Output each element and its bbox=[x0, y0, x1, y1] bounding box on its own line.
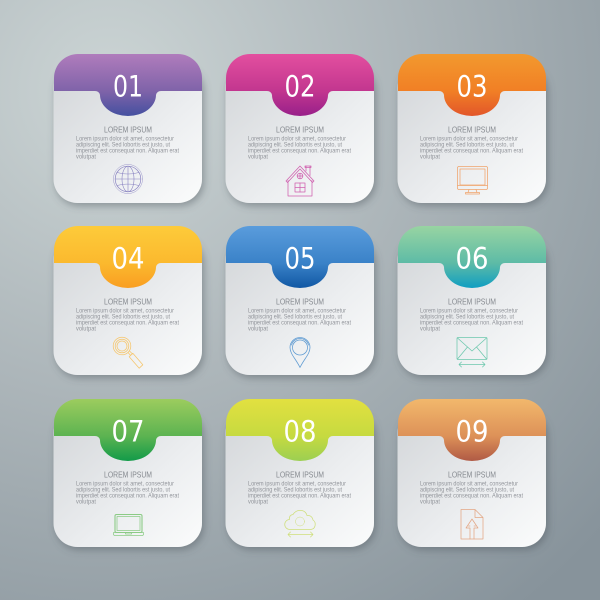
number: 04 bbox=[112, 242, 144, 276]
body text: Lorem ipsum dolor sit amet, consectetur bbox=[76, 136, 174, 142]
panel: card 07 bbox=[54, 399, 202, 547]
heading: LOREM IPSUM bbox=[276, 470, 324, 480]
body text: Lorem ipsum dolor sit amet, consectetur bbox=[76, 482, 174, 488]
heading: LOREM IPSUM bbox=[448, 124, 496, 134]
card body bbox=[226, 64, 374, 203]
body text: adipiscing elit. Sed lobortis est justo, ut bbox=[76, 142, 170, 148]
icon: laptop bbox=[114, 514, 144, 536]
card body bbox=[54, 409, 202, 547]
number: 09 bbox=[456, 414, 488, 448]
number: 01 bbox=[113, 70, 143, 104]
body text: imperdiet est consequat non. Aliquam erat bbox=[76, 494, 179, 500]
body text bbox=[420, 482, 523, 506]
body text: volutpat bbox=[76, 154, 96, 160]
body text: volutpat bbox=[420, 154, 440, 160]
body text: Lorem ipsum dolor sit amet, consectetur bbox=[420, 308, 518, 314]
body text bbox=[420, 136, 523, 160]
body text: adipiscing elit. Sed lobortis est justo, ut bbox=[248, 142, 342, 148]
body text: adipiscing elit. Sed lobortis est justo, ut bbox=[420, 314, 514, 320]
number: 03 bbox=[456, 70, 488, 104]
body text: volutpat bbox=[420, 326, 440, 332]
coloured header tab bbox=[226, 399, 374, 461]
number: 07 bbox=[112, 414, 144, 448]
body text: Lorem ipsum dolor sit amet, consectetur bbox=[248, 482, 346, 488]
coloured header tab bbox=[54, 226, 202, 288]
panel: card 09 bbox=[398, 399, 546, 547]
number: 02 bbox=[284, 70, 316, 104]
body text: adipiscing elit. Sed lobortis est justo, ut bbox=[76, 314, 170, 320]
body text: volutpat bbox=[76, 500, 96, 506]
heading: LOREM IPSUM bbox=[104, 296, 152, 306]
icon: globe bbox=[113, 164, 143, 194]
icon: house bbox=[286, 166, 314, 196]
icon: magnifier bbox=[113, 337, 143, 368]
panel: card 08 bbox=[226, 399, 374, 547]
body text bbox=[76, 136, 179, 160]
card body bbox=[54, 236, 202, 375]
body text: volutpat bbox=[248, 154, 268, 160]
icon: envelope bbox=[457, 338, 487, 367]
body text: Lorem ipsum dolor sit amet, consectetur bbox=[248, 308, 346, 314]
panel: card 04 bbox=[54, 226, 202, 375]
icon: cloud transfer bbox=[285, 510, 315, 537]
coloured header tab bbox=[54, 54, 202, 116]
icon: monitor bbox=[458, 166, 488, 194]
body text: adipiscing elit. Sed lobortis est justo, ut bbox=[420, 488, 514, 494]
card body bbox=[398, 236, 546, 375]
body text: volutpat bbox=[420, 500, 440, 506]
heading: LOREM IPSUM bbox=[276, 296, 324, 306]
body text: Lorem ipsum dolor sit amet, consectetur bbox=[248, 136, 346, 142]
panel: card 06 bbox=[398, 226, 546, 375]
body text bbox=[248, 482, 351, 506]
coloured header tab bbox=[398, 399, 546, 461]
card body bbox=[226, 236, 374, 375]
panel: card 03 bbox=[398, 54, 546, 203]
coloured header tab bbox=[226, 226, 374, 288]
body text: adipiscing elit. Sed lobortis est justo, ut bbox=[76, 488, 170, 494]
heading: LOREM IPSUM bbox=[104, 124, 152, 134]
body text: imperdiet est consequat non. Aliquam erat bbox=[248, 494, 351, 500]
body text bbox=[248, 308, 351, 332]
icon: file upload bbox=[461, 510, 483, 539]
body text: imperdiet est consequat non. Aliquam erat bbox=[420, 320, 523, 326]
card body bbox=[398, 409, 546, 547]
panel: card 01 bbox=[54, 54, 202, 203]
body text: imperdiet est consequat non. Aliquam erat bbox=[248, 148, 351, 154]
coloured header tab bbox=[226, 54, 374, 116]
body text: adipiscing elit. Sed lobortis est justo, ut bbox=[248, 314, 342, 320]
heading: LOREM IPSUM bbox=[448, 296, 496, 306]
panel: card 02 bbox=[226, 54, 374, 203]
coloured header tab bbox=[54, 399, 202, 461]
body text: volutpat bbox=[76, 326, 96, 332]
body text bbox=[76, 308, 179, 332]
card body bbox=[54, 64, 202, 203]
heading: LOREM IPSUM bbox=[448, 470, 496, 480]
body text: volutpat bbox=[248, 500, 268, 506]
body text: imperdiet est consequat non. Aliquam erat bbox=[248, 320, 351, 326]
heading: LOREM IPSUM bbox=[276, 124, 324, 134]
panel: card 05 bbox=[226, 226, 374, 375]
number: 05 bbox=[284, 242, 316, 276]
body text: imperdiet est consequat non. Aliquam erat bbox=[76, 320, 179, 326]
body text: imperdiet est consequat non. Aliquam erat bbox=[420, 494, 523, 500]
body text bbox=[76, 482, 179, 506]
card body bbox=[398, 64, 546, 203]
coloured header tab bbox=[398, 54, 546, 116]
body text: imperdiet est consequat non. Aliquam erat bbox=[420, 148, 523, 154]
body text: adipiscing elit. Sed lobortis est justo, ut bbox=[248, 488, 342, 494]
body text: adipiscing elit. Sed lobortis est justo, ut bbox=[420, 142, 514, 148]
body text: volutpat bbox=[248, 326, 268, 332]
body text: Lorem ipsum dolor sit amet, consectetur bbox=[420, 482, 518, 488]
heading: LOREM IPSUM bbox=[104, 470, 152, 480]
card body bbox=[226, 409, 374, 547]
body text bbox=[248, 136, 351, 160]
body text: Lorem ipsum dolor sit amet, consectetur bbox=[420, 136, 518, 142]
body text bbox=[420, 308, 523, 332]
icon: location pin bbox=[290, 338, 310, 368]
number: 08 bbox=[284, 414, 316, 448]
number: 06 bbox=[456, 242, 488, 276]
body text: Lorem ipsum dolor sit amet, consectetur bbox=[76, 308, 174, 314]
coloured header tab bbox=[398, 226, 546, 288]
body text: imperdiet est consequat non. Aliquam erat bbox=[76, 148, 179, 154]
